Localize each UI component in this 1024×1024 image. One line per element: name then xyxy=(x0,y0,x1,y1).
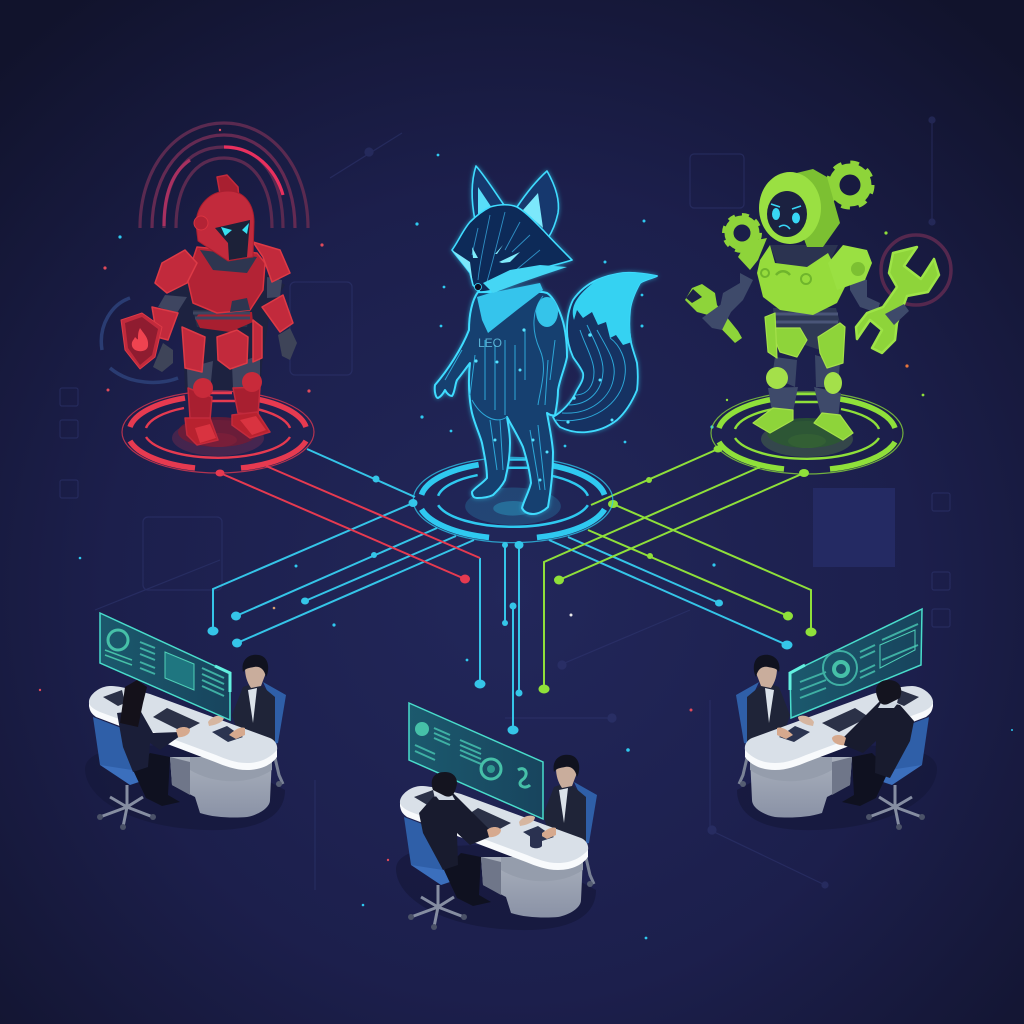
robot: green engineer xyxy=(685,163,951,448)
large wrench xyxy=(856,247,939,353)
gears xyxy=(724,163,872,251)
limbs xyxy=(850,273,880,313)
helmet xyxy=(217,175,240,210)
legs xyxy=(187,355,260,395)
dark underbody xyxy=(170,270,285,390)
shoulder glow xyxy=(536,297,558,327)
chest xyxy=(477,283,543,333)
woman at desk xyxy=(117,680,190,772)
red ring behind wrench xyxy=(881,235,951,305)
mug xyxy=(530,829,542,848)
hologram screen left xyxy=(100,613,230,720)
ears xyxy=(472,166,504,220)
panel: faint square xyxy=(813,488,895,567)
platform: red xyxy=(122,391,314,473)
shield xyxy=(121,313,162,369)
faint ring behind shield xyxy=(101,298,178,382)
platform: green xyxy=(711,392,903,474)
visor eyes xyxy=(221,223,249,236)
workstation: right team xyxy=(736,609,937,830)
waist and hip plates xyxy=(773,308,842,350)
torso xyxy=(770,245,838,272)
head xyxy=(452,205,572,292)
connection lines xyxy=(208,446,816,734)
shoulders and arms xyxy=(152,242,293,340)
particles xyxy=(39,129,1013,939)
nose xyxy=(474,284,482,290)
small wrench xyxy=(685,284,742,343)
small hand xyxy=(702,303,733,330)
background circuit decoration xyxy=(60,117,950,890)
robot: red defender xyxy=(101,175,297,447)
signal arcs over red robot xyxy=(140,123,308,228)
back arm and torso xyxy=(267,277,282,298)
pelvis plates xyxy=(182,320,262,372)
flame xyxy=(132,328,148,351)
chest label: LEO xyxy=(478,336,502,350)
eyes xyxy=(472,245,520,263)
man seen from behind, right xyxy=(832,680,914,778)
tail xyxy=(553,273,657,432)
man seen from behind, centre xyxy=(419,772,501,870)
robot face xyxy=(771,204,801,229)
red connectors xyxy=(216,466,480,584)
cyan connectors, left xyxy=(208,449,792,734)
circuit traces xyxy=(445,296,555,490)
hologram screen centre xyxy=(409,703,543,819)
workstation: left team xyxy=(85,613,286,830)
hologram screen right xyxy=(790,609,922,718)
workstation: centre team xyxy=(396,703,597,930)
character: holographic fox xyxy=(435,166,657,514)
head xyxy=(780,169,840,247)
platform: cyan xyxy=(413,457,613,543)
muzzle ruff xyxy=(452,250,473,285)
body xyxy=(435,292,567,514)
green connectors xyxy=(538,446,816,694)
